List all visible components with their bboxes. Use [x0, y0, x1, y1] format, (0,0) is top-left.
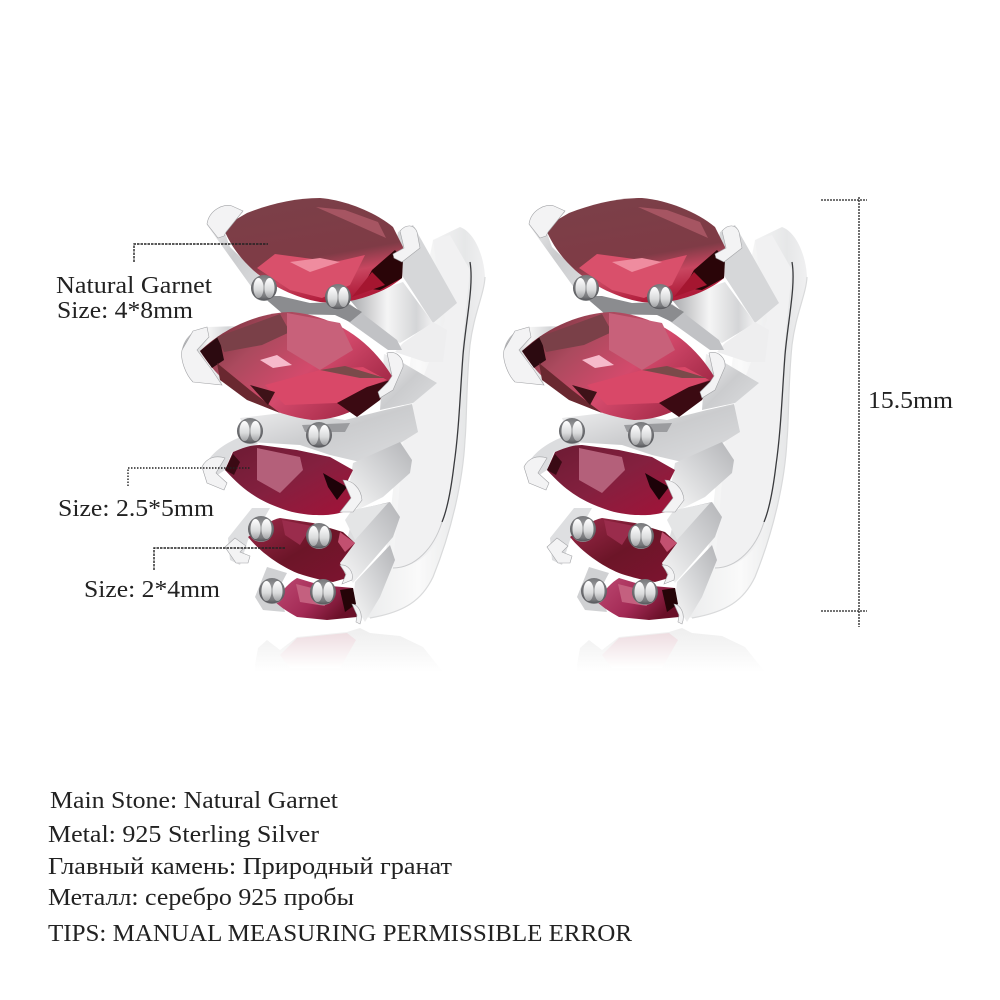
smallest marquise garnet	[275, 578, 357, 620]
large marquise garnet	[200, 312, 393, 420]
specification text block: Metal: 925 Sterling Silver	[48, 822, 319, 848]
prong bases and side settings	[182, 206, 457, 622]
specification text block: Главный камень: Природный гранат	[48, 854, 453, 880]
prong tips	[182, 205, 420, 624]
specification text block: Main Stone: Natural Garnet	[50, 788, 338, 814]
callout text: medium stone size: Size: 2.5*5mm	[58, 496, 214, 522]
height label: 15.5mm	[868, 388, 953, 414]
top marquise garnet	[223, 198, 403, 303]
specification text block	[48, 788, 632, 947]
callout leader: small stone	[154, 548, 286, 570]
callout text: natural garnet size: Size: 4*8mm	[57, 298, 193, 324]
small marquise garnet	[248, 518, 355, 582]
callout text: natural garnet size	[56, 273, 212, 324]
faint reflection	[255, 628, 443, 672]
callout leader: medium stone	[128, 468, 250, 486]
prong beads	[237, 275, 351, 605]
callout leader: top stone	[134, 244, 268, 262]
right earring	[504, 198, 807, 672]
medium marquise garnet	[225, 445, 353, 515]
callout text: small stone size: Size: 2*4mm	[84, 577, 220, 603]
specification text block: Металл: серебро 925 пробы	[48, 885, 354, 911]
callout text: natural garnet size: Natural Garnet	[56, 273, 212, 299]
specification text block: TIPS: MANUAL MEASURING PERMISSIBLE ERROR	[48, 921, 632, 947]
height dimension line	[821, 197, 867, 627]
earring band	[352, 227, 485, 618]
left earring	[182, 198, 485, 672]
